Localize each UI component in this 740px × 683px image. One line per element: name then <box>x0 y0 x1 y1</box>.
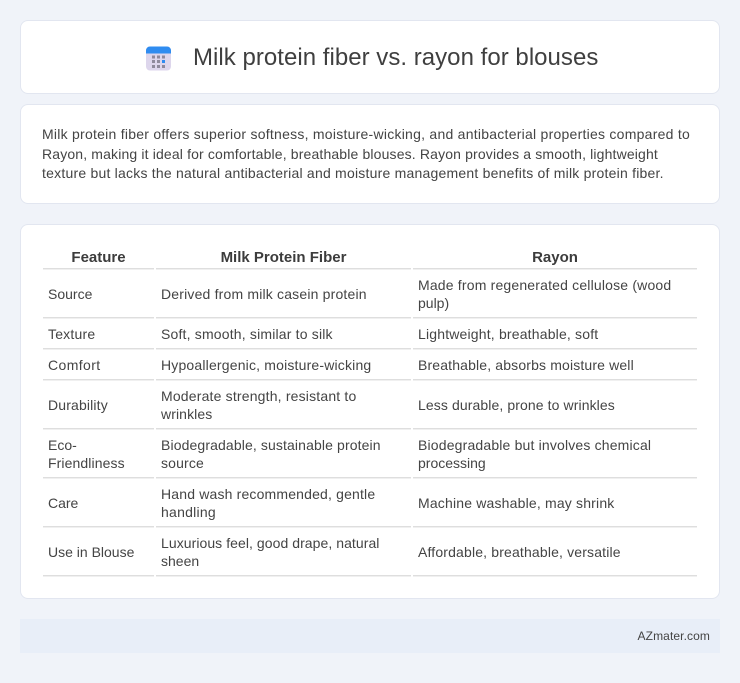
row: use in blouse: Affordable, breathable, versatile <box>418 544 621 560</box>
row: eco-friendliness: source <box>161 455 204 471</box>
footer bar <box>20 619 720 653</box>
row: texture: Lightweight, breathable, soft <box>418 326 598 342</box>
text block: summary: Rayon, making it ideal for comfortable, breathable blouses. Rayon provides a smooth, lightweight <box>42 146 658 162</box>
row: eco-friendliness: Biodegradable, sustainable protein <box>161 437 381 453</box>
row: eco-friendliness <box>48 437 651 471</box>
row: source <box>48 277 671 311</box>
row: use in blouse <box>48 535 621 569</box>
row: durability: Less durable, prone to wrinkles <box>418 397 615 413</box>
row: care: Machine washable, may shrink <box>418 495 614 511</box>
table header: Milk Protein Fiber <box>221 249 346 266</box>
text block: summary: texture but lacks the natural antibacterial and moisture management benefits of milk protein fiber. <box>42 165 664 181</box>
row: eco-friendliness: Friendliness <box>48 455 125 471</box>
row: comfort: Breathable, absorbs moisture well <box>418 357 634 373</box>
panel: summary text <box>20 104 720 204</box>
row: source: pulp) <box>418 295 449 311</box>
row: care: Care <box>48 495 78 511</box>
row: source: Made from regenerated cellulose (wood <box>418 277 671 293</box>
table header <box>71 249 578 266</box>
panel: title card <box>20 20 720 94</box>
row: comfort: Hypoallergenic, moisture-wicking <box>161 357 371 373</box>
row: care: Hand wash recommended, gentle <box>161 486 375 502</box>
row: source: Derived from milk casein protein <box>161 286 367 302</box>
row: eco-friendliness: Eco- <box>48 437 77 453</box>
row: source: Source <box>48 286 92 302</box>
row: use in blouse: sheen <box>161 553 199 569</box>
row: eco-friendliness: processing <box>418 455 486 471</box>
row: comfort: Comfort <box>48 357 101 373</box>
text block: summary <box>42 126 690 181</box>
row: comfort <box>48 357 634 373</box>
footer text: AZmater.com <box>638 629 710 643</box>
row: use in blouse: Use in Blouse <box>48 544 134 560</box>
row: use in blouse: Luxurious feel, good drape, natural <box>161 535 379 551</box>
row: eco-friendliness: Biodegradable but involves chemical <box>418 437 651 453</box>
table header: Rayon <box>532 249 578 266</box>
row: care: handling <box>161 504 216 520</box>
row: durability <box>48 388 615 422</box>
icon: calendar <box>146 46 171 70</box>
panel: comparison table <box>20 224 720 599</box>
text block: summary: Milk protein fiber offers superior softness, moisture-wicking, and antibacterial properties compared to <box>42 126 690 142</box>
title: Milk protein fiber vs. rayon for blouses <box>193 44 598 71</box>
row: texture: Texture <box>48 326 95 342</box>
row: durability: wrinkles <box>161 406 212 422</box>
row: texture <box>48 326 598 342</box>
row: texture: Soft, smooth, similar to silk <box>161 326 333 342</box>
table header: Feature <box>71 249 126 266</box>
row: care <box>48 486 614 520</box>
row: durability: Durability <box>48 397 108 413</box>
row: durability: Moderate strength, resistant to <box>161 388 356 404</box>
